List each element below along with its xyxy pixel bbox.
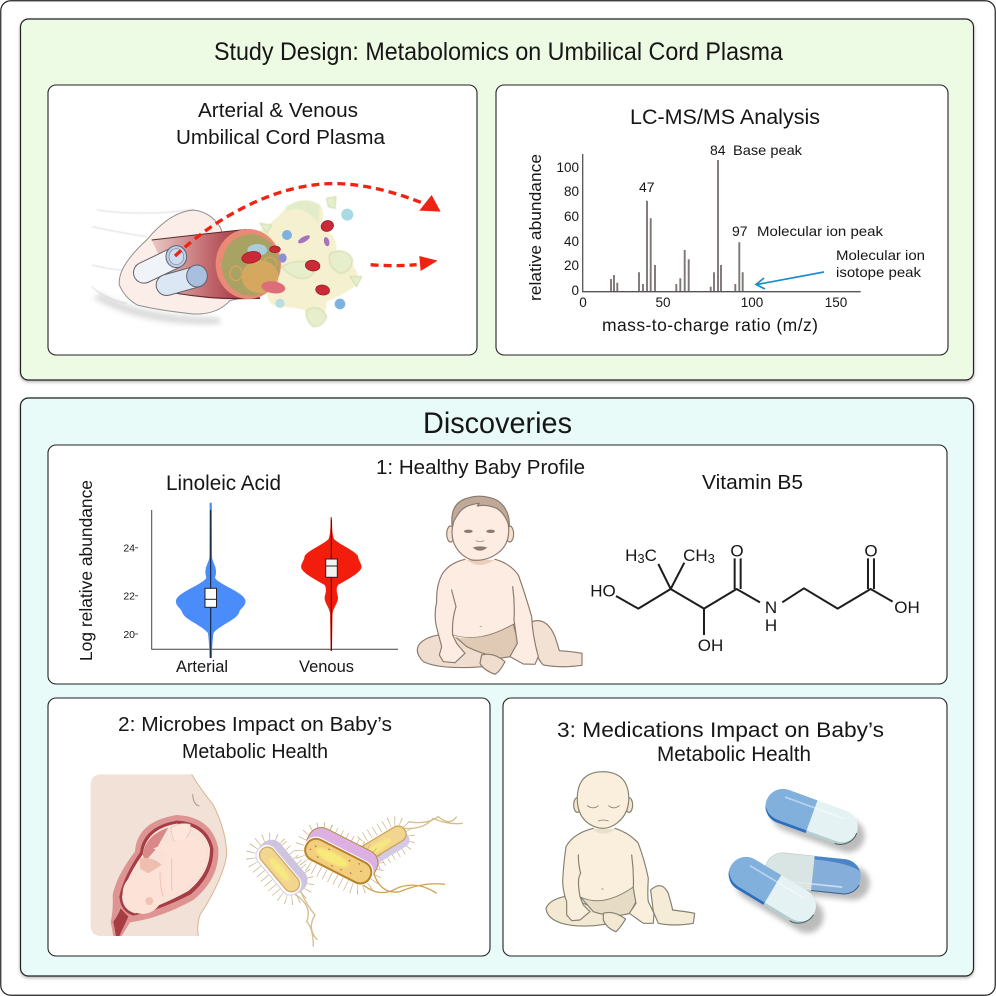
peak labels: 84	[710, 142, 726, 158]
y axis ticks	[556, 160, 579, 298]
card: healthy baby profile	[48, 445, 947, 684]
panel: discoveries	[20, 398, 974, 976]
arrow: upper red dashed	[175, 184, 441, 256]
card title line 1: 3: Medications Impact on Baby’s	[557, 719, 884, 742]
chemical structure: vitamin b5	[590, 472, 920, 655]
flagella	[293, 817, 463, 947]
torso	[442, 559, 520, 638]
capsule back	[763, 851, 863, 896]
atom labels: 3	[637, 551, 645, 566]
x labels: Arterial	[176, 658, 228, 676]
capsule shadows	[730, 793, 871, 939]
arrow: lower red dashed	[371, 256, 438, 271]
peak labels: Molecular ion	[836, 247, 925, 263]
plasma particles	[282, 230, 292, 240]
cut vessel face	[216, 229, 281, 299]
card title: lc-ms/ms analysis: LC-MS/MS Analysis	[630, 105, 820, 129]
x axis ticks: 150	[825, 295, 847, 310]
illustration: smiling baby	[417, 496, 582, 674]
atom labels: N	[765, 598, 777, 617]
left arm	[435, 559, 465, 663]
peak labels: Base peak	[733, 142, 803, 158]
right arm	[495, 559, 538, 664]
left leg	[546, 896, 605, 926]
peak labels: Molecular ion peak	[757, 223, 884, 239]
y axis ticks: 80	[564, 184, 579, 199]
card: lc-ms/ms analysis	[496, 85, 948, 355]
illustration: cut umbilical cord releasing plasma	[92, 184, 441, 327]
atom labels: H	[625, 546, 637, 565]
chart title: Linoleic Acid	[166, 472, 281, 495]
y ticks	[123, 542, 135, 641]
card: medications impact	[503, 698, 947, 956]
panel: study design	[20, 19, 974, 380]
blood cells	[241, 219, 335, 296]
card title line 1: 2: Microbes Impact on Baby’s	[118, 714, 392, 736]
card: umbilical cord plasma	[48, 85, 477, 355]
y axis ticks: 100	[556, 160, 579, 175]
y axis ticks: 60	[564, 209, 579, 224]
molecule title: Vitamin B5	[702, 472, 803, 494]
illustration: fetus in womb	[91, 774, 227, 936]
illustration: sleeping baby	[546, 772, 695, 932]
peak labels: 47	[639, 179, 655, 195]
violin chart: linoleic acid: Venous	[299, 657, 354, 676]
right leg	[651, 886, 695, 925]
card title: arterial and venous: Arterial & Venous	[198, 100, 358, 122]
right arm	[615, 828, 654, 923]
x axis label: mass-to-charge ratio (m/z)	[602, 315, 818, 335]
card title line 2: Metabolic Health	[657, 743, 811, 766]
foot	[603, 912, 626, 932]
y axis ticks: 0	[571, 283, 579, 298]
capsule top	[761, 784, 863, 849]
atom labels: HO	[590, 582, 616, 600]
heading: study design: Study Design: Metabolomics on Umbilical Cord Plasma	[214, 38, 783, 66]
bacterium center	[294, 822, 384, 895]
y axis label: relative abundance	[526, 154, 545, 301]
x axis ticks: 0	[579, 295, 587, 310]
atom labels: OH	[894, 598, 920, 617]
ears	[574, 798, 581, 812]
umbilical vessels	[144, 246, 207, 287]
ears	[447, 526, 455, 542]
capsule front	[722, 850, 822, 930]
diaper	[580, 886, 636, 915]
atom labels: C	[645, 546, 657, 565]
left leg	[417, 634, 487, 668]
atom labels: CH	[683, 546, 708, 565]
y axis ticks: 40	[564, 234, 579, 249]
y ticks: 20	[123, 629, 135, 641]
diaper	[453, 624, 518, 658]
foot	[480, 654, 505, 674]
bonds	[616, 558, 893, 635]
mass spectrum chart	[526, 142, 925, 335]
head	[452, 500, 509, 560]
x axis ticks: 50	[655, 295, 671, 310]
head	[577, 772, 629, 828]
face	[587, 806, 619, 889]
peak labels	[639, 142, 925, 280]
heading: discoveries: Discoveries	[423, 407, 572, 440]
atom labels	[590, 542, 920, 655]
venous violin	[301, 517, 362, 651]
torso	[568, 828, 638, 901]
illustration: capsules	[722, 784, 871, 939]
violin chart: linoleic acid	[76, 472, 398, 676]
atom labels: H	[765, 616, 777, 635]
atom labels: OH	[698, 636, 723, 655]
atom labels: 3	[708, 551, 715, 566]
hair	[452, 496, 509, 527]
y ticks: 24	[123, 542, 135, 554]
y ticks: 22	[123, 590, 135, 602]
card title: umbilical cord plasma: Umbilical Cord Plasma	[176, 126, 386, 149]
y axis label: Log relative abundance	[76, 480, 96, 661]
left arm	[563, 828, 593, 921]
peak labels: isotope peak	[836, 264, 922, 280]
face	[464, 530, 473, 533]
x axis ticks: 100	[741, 295, 763, 310]
card title line 2: Metabolic Health	[182, 741, 328, 763]
atom labels: O	[730, 542, 744, 560]
y axis ticks: 20	[564, 258, 579, 273]
illustration: bacteria	[245, 816, 463, 947]
right leg	[532, 621, 582, 667]
card title: healthy baby profile: 1: Healthy Baby Profile	[376, 456, 585, 479]
atom labels: O	[864, 542, 878, 560]
fetus	[150, 836, 206, 903]
peak labels: 97	[732, 223, 748, 239]
arrow: isotope peak pointer	[756, 272, 824, 289]
x axis ticks	[579, 295, 847, 310]
card: microbes impact	[48, 698, 490, 956]
bacterium right	[353, 816, 415, 871]
plasma burst	[260, 197, 362, 327]
arterial violin	[176, 503, 246, 658]
bacterium left	[245, 832, 315, 906]
